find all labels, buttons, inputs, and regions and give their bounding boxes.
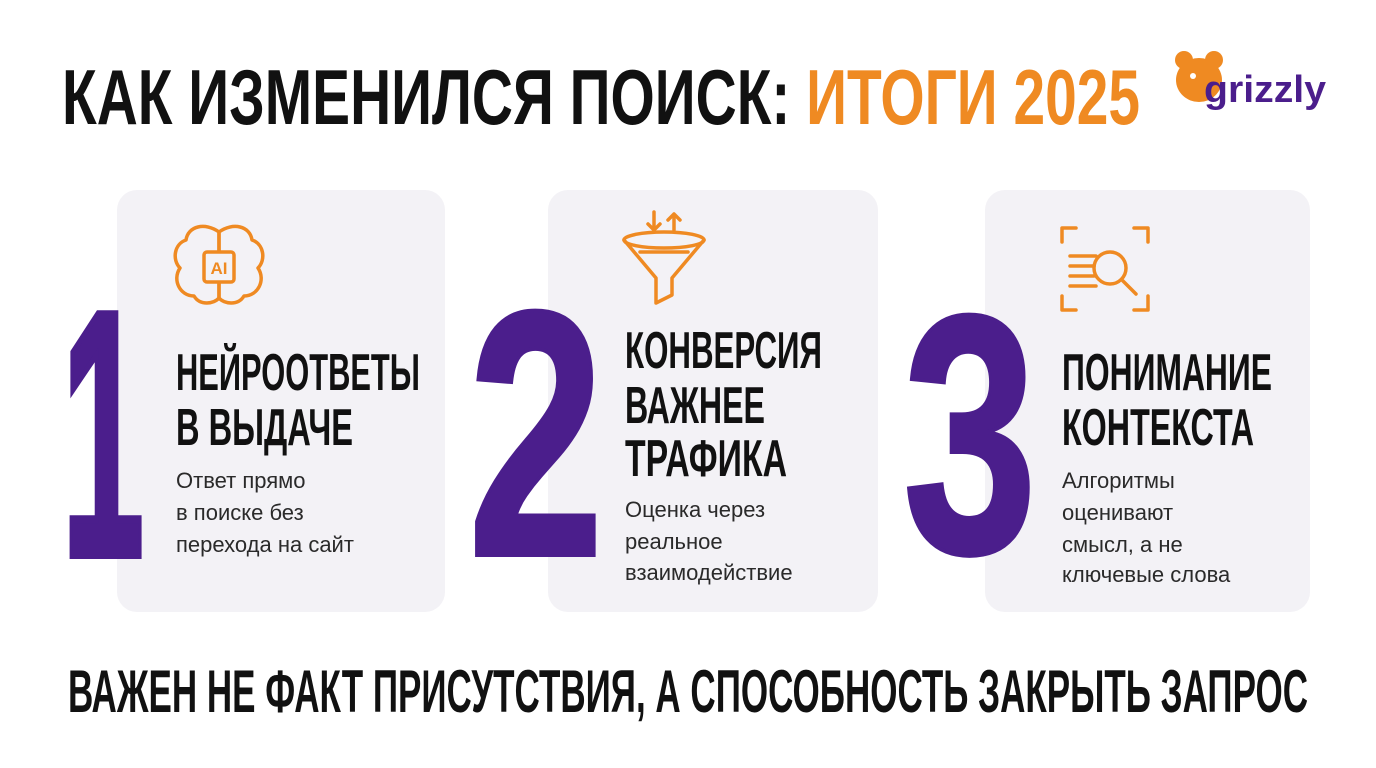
- body text: Оценка через: [625, 497, 765, 522]
- panel: card 3: КОНТЕКСТА: [1062, 399, 1254, 457]
- body text: Ответ прямо: [176, 468, 306, 493]
- icon: AI brain: [175, 226, 263, 303]
- big number 3: 3: [903, 245, 1037, 625]
- panel: card 1: перехода на сайт: [176, 532, 354, 557]
- panel: card 2: ВАЖНЕЕ: [625, 377, 765, 435]
- body text: Алгоритмы: [1062, 468, 1175, 493]
- panel: card 1: в поиске без: [176, 500, 304, 525]
- panel: card 2: ТРАФИКА: [625, 430, 787, 488]
- panel: card 2: реальное: [625, 529, 723, 554]
- panel: card 1: [62, 190, 445, 630]
- panel: card 1: 1: [62, 239, 144, 630]
- icon: funnel: [624, 212, 704, 303]
- heading: КОНВЕРСИЯ: [625, 322, 822, 380]
- panel: card 3: смысл, а не: [1062, 532, 1183, 557]
- panel: card 3: ключевые слова: [1062, 562, 1231, 587]
- panel: card 3: [903, 190, 1310, 625]
- logo: grizzly: grizzly: [1204, 69, 1326, 111]
- panel: card 1: В ВЫДАЧЕ: [176, 399, 353, 457]
- icon: search context: [1062, 228, 1148, 310]
- title: КАК ИЗМЕНИЛСЯ ПОИСК: ИТОГИ 2025: [62, 53, 1140, 141]
- icon: AI brain: AI: [210, 259, 228, 278]
- heading: НЕЙРООТВЕТЫ: [176, 343, 420, 402]
- panel: card 2: взаимодействие: [625, 560, 793, 585]
- big number 2: 2: [468, 239, 604, 630]
- panel: card 3: оценивают: [1062, 500, 1173, 525]
- logo: grizzly: [1175, 51, 1326, 111]
- panel: card 2: [468, 190, 878, 630]
